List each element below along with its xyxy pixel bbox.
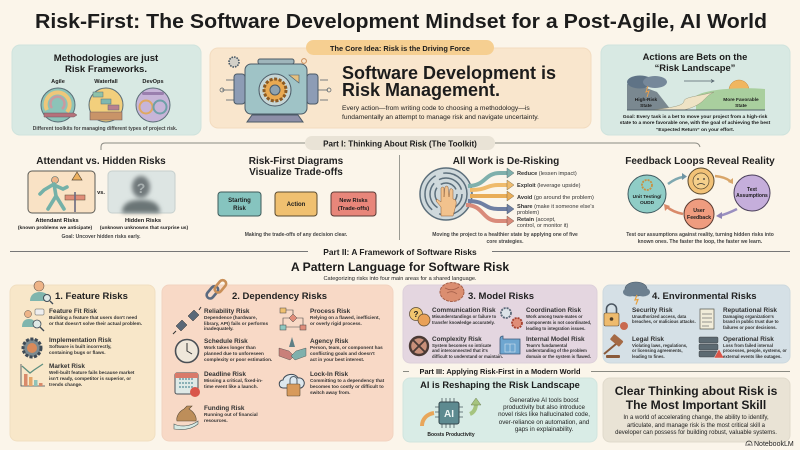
box: starting risk: Risk bbox=[233, 206, 246, 212]
panel: AI reshaping bbox=[403, 378, 597, 442]
item: market risk bbox=[21, 363, 135, 387]
item: operational risk: Loss from failed internal bbox=[723, 343, 773, 348]
item: implementation risk: Software is built incorrectly, bbox=[49, 344, 111, 349]
chart: risk landscape: State bbox=[735, 103, 747, 109]
panel: environmental risks bbox=[603, 282, 790, 363]
chart: risk landscape bbox=[627, 76, 765, 110]
section: all work is de-risking bbox=[420, 156, 594, 245]
chart: feedback loop: User bbox=[693, 208, 705, 214]
pill: the core idea bbox=[306, 40, 494, 55]
heading: environmental risks: 4. Environmental Risks bbox=[652, 291, 757, 302]
section: risk-first diagrams bbox=[218, 156, 376, 238]
icon: devops bbox=[136, 79, 170, 122]
item: implementation risk bbox=[23, 337, 112, 357]
item: schedule risk: complexity or poor estimation. bbox=[204, 357, 272, 362]
item: reliability risk: Reliability Risk bbox=[204, 308, 250, 315]
icon: AI chip bbox=[422, 398, 481, 428]
item: market risk: trends change. bbox=[49, 382, 82, 387]
label: hidden risks: (unknown unknowns that surprise us) bbox=[100, 225, 189, 231]
title: Risk-First: The Software Development Mindset for a Post-Agile, AI World bbox=[35, 10, 767, 33]
item: reliability risk: library, API) fails or performs bbox=[204, 321, 268, 326]
heading: actions are bets: Actions are Bets on the bbox=[643, 51, 747, 62]
item: lock-in risk: becomes too costly or difficult to bbox=[310, 384, 384, 389]
part I divider bbox=[101, 136, 700, 150]
item: coordination risk: Coordination Risk bbox=[526, 307, 581, 314]
icon: feature user bbox=[30, 281, 53, 304]
item: coordination risk: Work among team-mates or bbox=[526, 314, 583, 319]
chart: feedback loop: Assumptions bbox=[736, 193, 768, 199]
text: every action: fundamentally an attempt to manage risk and navigate uncertainty. bbox=[342, 114, 539, 121]
item: reputational risk: Damaging organization's bbox=[723, 314, 775, 319]
item: agency risk: conflicting goals and doesn't bbox=[310, 351, 375, 356]
chart: feedback loop: Unit Testing/ bbox=[633, 194, 662, 200]
section: attendant vs hidden bbox=[18, 156, 189, 240]
item: process risk: Process Risk bbox=[310, 308, 351, 315]
item: funding risk: Funding Risk bbox=[204, 405, 245, 412]
item: reputational risk: brand in public trust due to bbox=[723, 319, 779, 324]
item: reliability risk: Dependence (hardware, bbox=[204, 315, 257, 320]
item: communication risk: transfer knowledge accurately. bbox=[432, 320, 495, 325]
icon: chain link bbox=[205, 279, 228, 300]
item: internal model risk: Internal Model Risk bbox=[526, 336, 585, 343]
item: funding risk bbox=[174, 405, 258, 429]
item: legal risk bbox=[604, 334, 687, 359]
box: new risks bbox=[331, 192, 376, 216]
item: complexity risk: difficult to understand or maintain. bbox=[432, 354, 503, 359]
item: process risk bbox=[280, 308, 380, 330]
watermark: NotebookLM: NotebookLM bbox=[754, 441, 794, 448]
caption: Making the trade-offs of any decision clear. bbox=[245, 232, 348, 238]
box: action: Action bbox=[287, 202, 306, 208]
text: vs: vs. bbox=[97, 190, 105, 196]
item: reputational risk bbox=[700, 307, 779, 330]
item: complexity risk: System becomes so intricate bbox=[432, 343, 492, 348]
item: internal model risk bbox=[500, 336, 591, 359]
item: internal model risk: domain or the system is flawed. bbox=[526, 354, 591, 359]
text: categorizing risks: Categorizing risks into four main areas for a shared language. bbox=[324, 276, 477, 282]
item: communication risk: ? bbox=[414, 310, 419, 319]
text: accelerating change: In a world of accelerating change, the ability to identify, bbox=[623, 415, 769, 421]
heading: Risk-First Diagrams bbox=[249, 156, 344, 167]
label: hidden risks: Hidden Risks bbox=[125, 218, 161, 224]
item: deadline risk bbox=[175, 371, 263, 397]
text: every action: Every action—from writing code to choosing a methodology—is bbox=[342, 105, 530, 112]
chart: feedback loop: OUDD bbox=[640, 200, 655, 206]
heading: All Work is De-Risking bbox=[453, 156, 559, 167]
icon: agile bbox=[41, 79, 77, 122]
label: attendant risks: Attendant Risks bbox=[35, 218, 79, 224]
icon: waterfall: Waterfall bbox=[94, 79, 118, 85]
item: agency risk bbox=[279, 337, 383, 362]
icon: hidden risk: ? bbox=[137, 180, 145, 196]
heading: Attendant vs. Hidden Risks bbox=[36, 156, 166, 167]
item: coordination risk bbox=[501, 307, 591, 331]
heading: software development is risk management: Software Development is bbox=[342, 63, 556, 83]
item: schedule risk bbox=[176, 338, 272, 362]
icon: devops: DevOps bbox=[142, 79, 164, 85]
pill: the core idea: The Core Idea: Risk is the Driving Force bbox=[330, 44, 470, 53]
item: legal risk: Violating laws, regulations, bbox=[632, 343, 687, 348]
item: schedule risk: planned due to unforeseen bbox=[204, 351, 264, 356]
labels: strategies: Avoid (go around the problem) bbox=[517, 195, 594, 201]
icon: engine bbox=[220, 57, 331, 122]
text: accelerating change: developer can possess for building robust, valuable systems. bbox=[615, 430, 777, 436]
chart: feedback loop bbox=[628, 168, 770, 229]
panel: dependency risks bbox=[162, 279, 393, 441]
chart: feedback loop: Text bbox=[747, 187, 757, 193]
item: security risk: breaches, or malicious attacks. bbox=[632, 319, 696, 324]
item: feature fit risk: Building a feature that users don't need bbox=[49, 315, 137, 320]
item: lock-in risk: Committing to a dependency that bbox=[310, 378, 385, 383]
item: agency risk: Agency Risk bbox=[310, 338, 349, 345]
chart: risk landscape: State bbox=[640, 103, 652, 109]
heading: Feedback Loops Reveal Reality bbox=[625, 156, 775, 167]
item: coordination risk: leading to integration issues. bbox=[526, 326, 585, 331]
item: market risk: Market Risk bbox=[49, 363, 85, 370]
item: reliability risk bbox=[173, 307, 268, 334]
item: deadline risk: Missing a critical, fixed-in- bbox=[204, 378, 263, 383]
item: schedule risk: Work takes longer than bbox=[204, 345, 256, 350]
label: attendant risks: (known problems we anticipate) bbox=[18, 225, 92, 231]
item: feature fit risk: or that doesn't solve their actual problem. bbox=[49, 321, 142, 326]
icon: hidden risk bbox=[108, 171, 175, 213]
item: process risk: Relying on a flawed, inefficient, bbox=[310, 315, 380, 320]
item: legal risk: Legal Risk bbox=[632, 336, 664, 343]
heading: AI: AI is Reshaping the Risk Landscape bbox=[420, 380, 580, 390]
text: accelerating change: articulate, and manage risk is the most critical skill a bbox=[627, 423, 766, 429]
section: feedback loops bbox=[625, 156, 775, 245]
item: schedule risk: Schedule Risk bbox=[204, 338, 248, 345]
text: generative AI: productivity but also introduce bbox=[503, 404, 585, 411]
panel: methodologies bbox=[12, 45, 201, 135]
item: security risk: Unauthorized access, data bbox=[632, 314, 687, 319]
labels: strategies: Exploit (leverage upside) bbox=[517, 183, 581, 189]
item: deadline risk: time event like a launch. bbox=[204, 384, 258, 389]
caption: known ones. The faster the loop, the faster we learn. bbox=[638, 239, 763, 245]
heading: actions are bets: “Risk Landscape” bbox=[655, 62, 735, 73]
heading: Visualize Trade-offs bbox=[249, 167, 343, 178]
item: reputational risk: Reputational Risk bbox=[723, 307, 777, 314]
item: operational risk bbox=[699, 336, 787, 359]
item: market risk: isn't ready, competitor is superior, or bbox=[49, 376, 131, 381]
labels: strategies: Reduce (lessen impact) bbox=[517, 171, 577, 177]
item: operational risk: external events like outages. bbox=[723, 354, 782, 359]
text: generative AI: Generative AI tools boost bbox=[509, 397, 579, 404]
item: reputational risk: failures or poor decisions. bbox=[723, 325, 777, 330]
icon: AI chip: AI bbox=[444, 409, 454, 420]
label: boosts productivity: Boosts Productivity bbox=[427, 432, 475, 438]
heading: methodologies: Risk Frameworks. bbox=[65, 64, 147, 75]
panel: clear thinking bbox=[603, 378, 790, 442]
labels: strategies: Retain (accept, bbox=[517, 217, 556, 223]
icon: storm cloud bbox=[623, 282, 650, 304]
chart: risk landscape: More Favorable bbox=[723, 97, 759, 103]
item: agency risk: act in your best interest. bbox=[310, 357, 364, 362]
caption: goal: Goal: Uncover hidden risks early. bbox=[61, 234, 141, 240]
labels: strategies bbox=[517, 171, 594, 229]
item: lock-in risk: Lock-In Risk bbox=[310, 371, 348, 378]
heading: pattern language: A Pattern Language for Software Risk bbox=[291, 260, 509, 274]
item: communication risk: Communication Risk bbox=[432, 307, 496, 314]
text: generative AI: gaps in explainability. bbox=[515, 426, 573, 433]
panel: feature risks bbox=[10, 281, 155, 441]
item: coordination risk: components is not coordinated, bbox=[526, 320, 591, 325]
heading: model risks: 3. Model Risks bbox=[468, 291, 534, 302]
part I divider: Part I: Thinking About Risk (The Toolkit) bbox=[323, 140, 477, 148]
item: funding risk: Running out of financial bbox=[204, 412, 258, 417]
caption: goal: Goal: Every task is a bet to move your project from a high-risk bbox=[623, 114, 768, 120]
item: communication risk bbox=[410, 307, 497, 326]
item: operational risk: Operational Risk bbox=[723, 336, 774, 343]
item: deadline risk: Deadline Risk bbox=[204, 371, 246, 378]
item: feature fit risk: Feature Fit Risk bbox=[49, 308, 97, 315]
chart: feedback loop: Feedback bbox=[687, 215, 711, 221]
panel: model risks bbox=[403, 282, 597, 363]
item: funding risk: resources. bbox=[204, 418, 228, 423]
chart: strategy arrows bbox=[466, 168, 514, 226]
item: reliability risk: inadequately. bbox=[204, 326, 234, 331]
heading: feature risks: 1. Feature Risks bbox=[55, 291, 128, 302]
item: legal risk: leading to fines. bbox=[632, 354, 665, 359]
item: process risk: or overly rigid process. bbox=[310, 321, 362, 326]
labels: strategies: control, or monitor it) bbox=[517, 223, 568, 229]
heading: dependency risks: 2. Dependency Risks bbox=[232, 291, 327, 302]
part II divider: Part II: A Framework of Software Risks bbox=[323, 247, 477, 257]
item: communication risk: Misunderstandings or failure to bbox=[432, 314, 497, 319]
item: implementation risk: containing bugs or flaws. bbox=[49, 350, 106, 355]
caption: goal: “Expected Return” on your effort. bbox=[656, 127, 735, 133]
labels: strategies: problem) bbox=[517, 210, 539, 216]
labels: strategies: Share (make it someone else's bbox=[517, 204, 594, 210]
caption: Test our assumptions against reality, turning hidden risks into bbox=[626, 232, 774, 238]
item: complexity risk bbox=[410, 336, 503, 359]
heading: methodologies: Methodologies are just bbox=[54, 53, 159, 64]
icon: attendant risk bbox=[28, 171, 95, 213]
box: starting risk bbox=[218, 192, 261, 216]
panel: actions are bets bbox=[601, 45, 790, 135]
box: action bbox=[275, 192, 317, 216]
item: feature fit risk bbox=[22, 308, 142, 331]
item: complexity risk: and interconnected that it's bbox=[432, 348, 489, 353]
icon: brain bbox=[440, 282, 464, 302]
item: internal model risk: understanding of the problem bbox=[526, 348, 587, 353]
icon: labyrinth bbox=[420, 168, 472, 220]
chart: risk landscape: High-Risk bbox=[635, 97, 658, 103]
box: new risks: (Trade-offs) bbox=[338, 206, 369, 212]
panel: core idea bbox=[210, 48, 591, 128]
part III divider: Part III: Applying Risk-First in a Modern World bbox=[420, 367, 581, 376]
item: lock-in risk: switch away from. bbox=[310, 390, 350, 395]
item: operational risk: processes, people, systems, or bbox=[723, 348, 787, 353]
item: legal risk: or licensing agreements, bbox=[632, 348, 683, 353]
heading: clear thinking: The Most Important Skill bbox=[626, 398, 766, 412]
item: market risk: Well-built feature fails because market bbox=[49, 370, 135, 375]
heading: software development is risk management: Risk Management. bbox=[342, 80, 500, 100]
item: complexity risk: Complexity Risk bbox=[432, 336, 482, 343]
caption: Moving the project to a healthier state by applying one of five bbox=[432, 232, 578, 238]
heading: clear thinking: Clear Thinking about Risk is bbox=[615, 384, 778, 398]
item: lock-in risk bbox=[279, 371, 385, 396]
icon: agile: Agile bbox=[51, 79, 65, 85]
item: security risk: Security Risk bbox=[632, 307, 673, 314]
box: starting risk: Starting bbox=[228, 198, 251, 204]
item: agency risk: Person, team, or component has bbox=[310, 345, 383, 350]
caption: different toolkits: Different toolkits for managing different types of project risk. bbox=[33, 126, 178, 132]
item: implementation risk: Implementation Risk bbox=[49, 337, 112, 344]
caption: core strategies. bbox=[487, 239, 524, 245]
icon: waterfall bbox=[89, 79, 123, 122]
item: internal model risk: Team's fundamental bbox=[526, 343, 567, 348]
caption: goal: state to a more favorable one, with the goal of achieving the best bbox=[620, 120, 771, 126]
text: generative AI: over-reliance on automation, and bbox=[499, 419, 590, 426]
box: new risks: New Risks bbox=[339, 198, 368, 204]
text: generative AI: novel risks like hallucinated code, bbox=[498, 411, 590, 418]
item: security risk bbox=[604, 304, 696, 330]
